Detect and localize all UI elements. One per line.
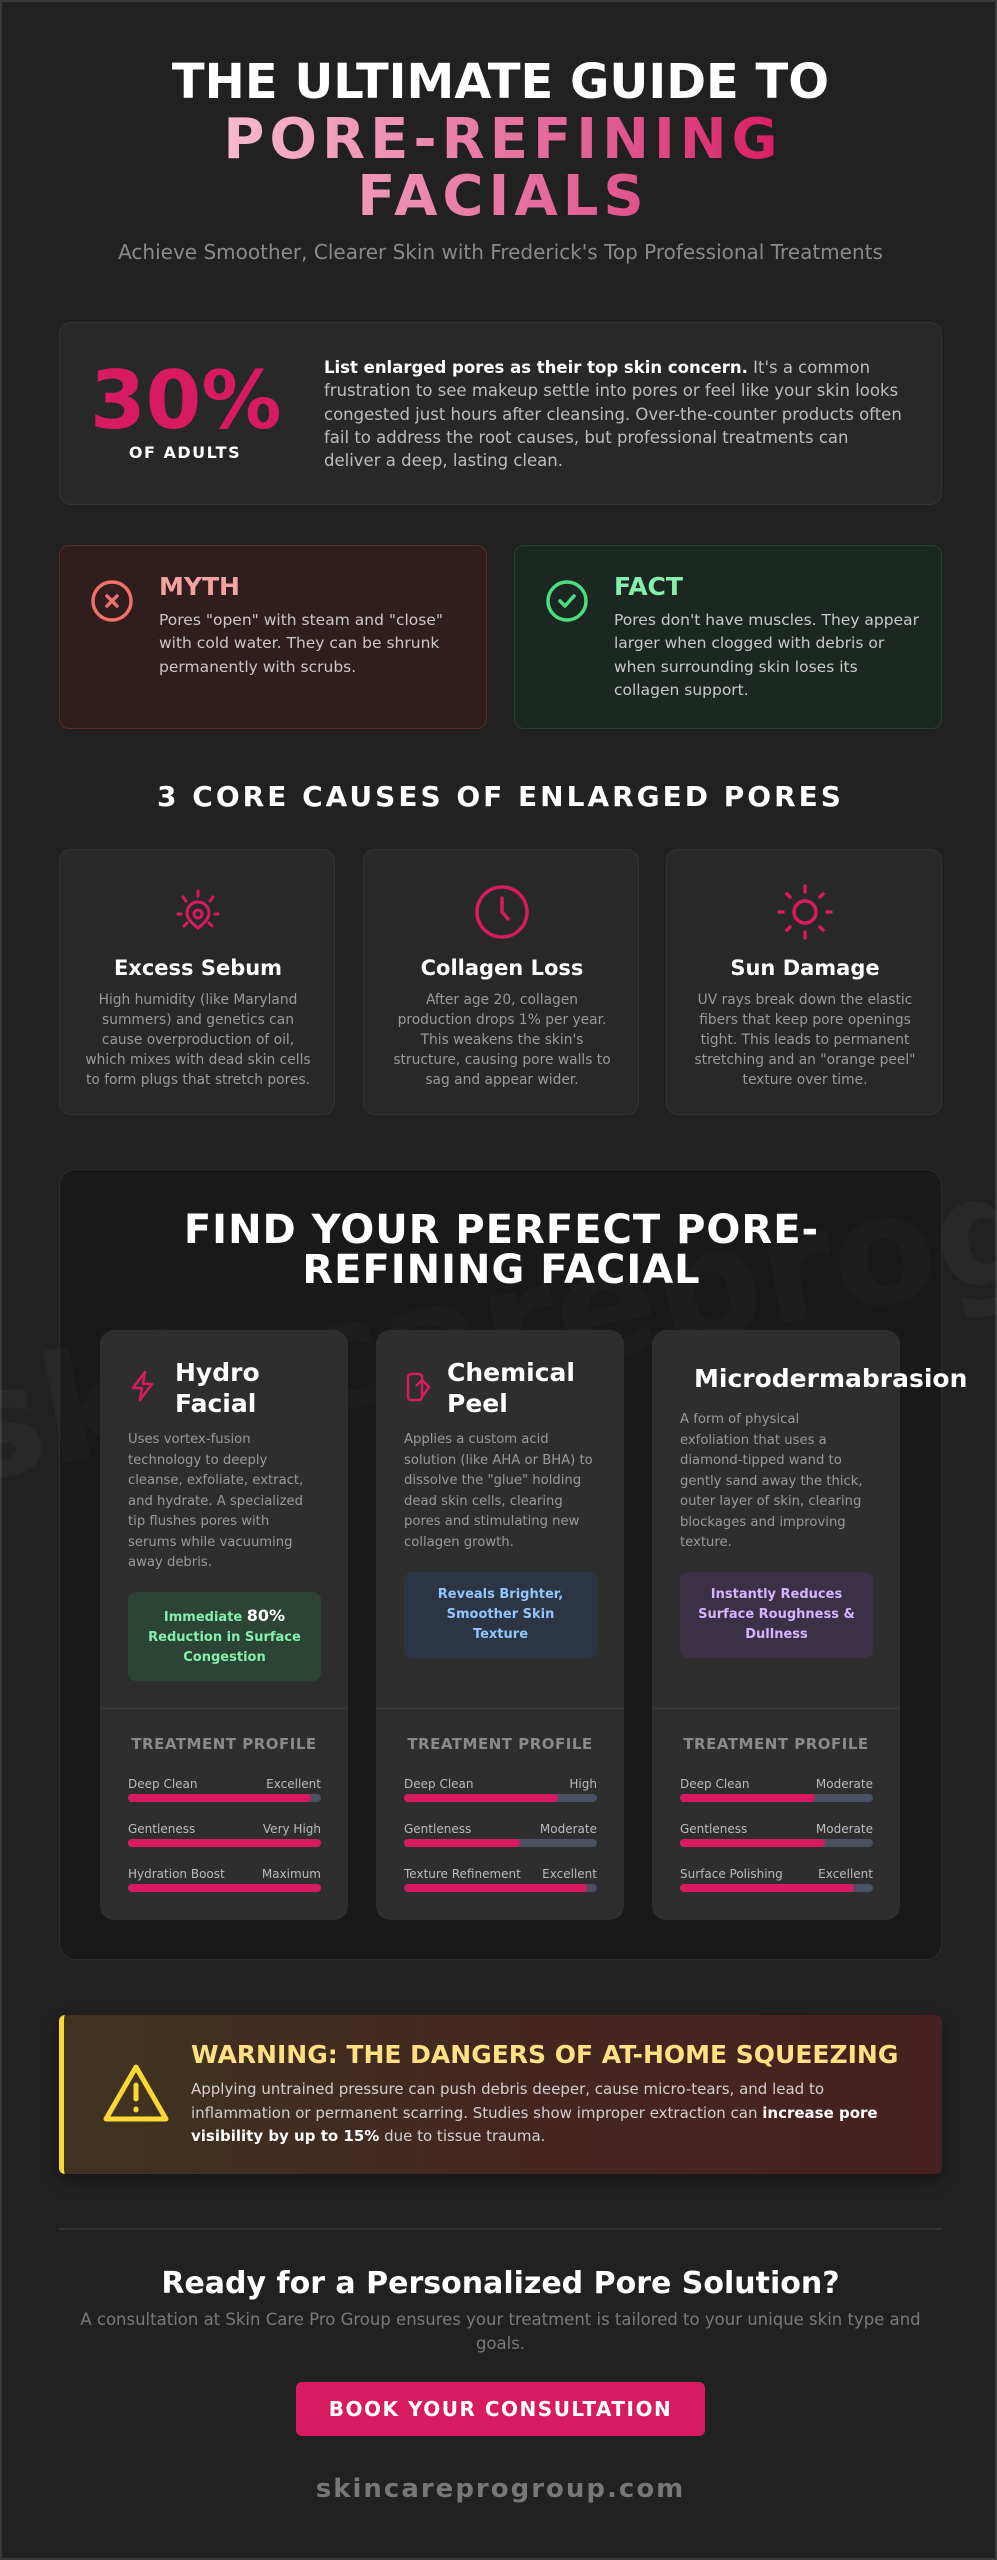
title: FACIALS [357, 164, 649, 229]
myth text: Pores "open" with steam and "close" with cold water. They can be shrunk permanently with scrubs. [159, 611, 443, 676]
micro text: A form of physical exfoliation that uses a diamond-tipped wand to gently sand away the thick, outer layer of skin, clearing blockages and improving texture. [680, 1412, 863, 1550]
panel: collagen loss [363, 849, 639, 1115]
card: chemical peel [376, 1330, 624, 1920]
hydro badge [128, 1592, 321, 1681]
micro profile: Moderate [816, 1777, 873, 1791]
hydro profile: Deep Clean [128, 1777, 198, 1791]
micro profile: Gentleness [680, 1822, 747, 1836]
micro profile: Surface Polishing [680, 1867, 783, 1881]
micro profile: Excellent [818, 1867, 873, 1881]
peel profile [376, 1708, 624, 1920]
peel profile: Excellent [542, 1867, 597, 1881]
stat number: 30% [90, 354, 281, 447]
warning heading: WARNING: THE DANGERS OF AT-HOME SQUEEZING [191, 2040, 898, 2069]
treatments heading: FIND YOUR PERFECT PORE- [184, 1207, 819, 1253]
micro badge: Dullness [745, 1627, 808, 1642]
fact text: Pores don't have muscles. They appear larger when clogged with debris or when surrounding skin loses its collagen support. [614, 611, 919, 699]
treatments heading: REFINING FACIAL [302, 1247, 701, 1293]
hydro badge: Immediate 80% Reduction in Surface Congestion [148, 1606, 301, 1665]
subtitle: Achieve Smoother, Clearer Skin with Frederick's Top Professional Treatments [118, 240, 883, 264]
title: PORE-REFINING [223, 107, 783, 172]
card: microdermabrasion [652, 1330, 900, 1920]
domain: skincareprogroup.com [316, 2474, 685, 2504]
sun title: Sun Damage [730, 956, 880, 980]
peel title [447, 1358, 575, 1418]
hydro profile: Very High [263, 1822, 321, 1836]
hydro title [175, 1358, 260, 1418]
peel badge: Smoother Skin [447, 1607, 554, 1622]
sebum title: Excess Sebum [114, 956, 282, 980]
warning text: Applying untrained pressure can push debris deeper, cause micro-tears, and lead to inflammation or permanent scarring. Studies show improper extraction can increase pore visibility by up to 15% due to tissue trauma. [191, 2080, 878, 2145]
micro badge: Instantly Reduces [711, 1587, 842, 1602]
micro profile: TREATMENT PROFILE [683, 1735, 869, 1753]
stat label: OF ADULTS [129, 443, 241, 462]
sebum text: High humidity (like Maryland summers) and genetics can cause overproduction of oil, which mixes with dead skin cells to form plugs that stretch pores. [85, 992, 311, 1088]
peel badge [404, 1572, 597, 1658]
micro badge: Surface Roughness & [698, 1607, 855, 1622]
micro profile [652, 1708, 900, 1920]
micro badge [680, 1572, 873, 1658]
icon: bolt [132, 1370, 154, 1402]
stat text: List enlarged pores as their top skin concern. It's a common frustration to see makeup settle into pores or feel like your skin looks congested just hours after cleansing. Over-the-counter products often fail to address the root causes, but professional treatments can deliver a deep, lasting clean. [324, 358, 902, 470]
collagen text: After age 20, collagen production drops 1% per year. This weakens the skin's structure, causing pore walls to sag and appear wider. [393, 992, 611, 1088]
panel: fact [514, 545, 942, 729]
warning callout [59, 2015, 942, 2174]
title [172, 54, 829, 229]
panel: treatments [59, 1169, 942, 1960]
myth heading: MYTH [159, 572, 240, 601]
icon: sun [777, 884, 833, 940]
cta heading: Ready for a Personalized Pore Solution? [161, 2266, 840, 2301]
hydro title: Facial [175, 1389, 256, 1418]
peel badge: Reveals Brighter, [438, 1587, 563, 1602]
hydro profile: Gentleness [128, 1822, 195, 1836]
icon: peel [406, 1372, 430, 1402]
hydro text: Uses vortex-fusion technology to deeply cleanse, exfoliate, extract, and hydrate. A specialized tip flushes pores with serums while vacuuming away debris. [128, 1432, 303, 1570]
peel badge: Texture [473, 1627, 528, 1642]
hydro title: Hydro [175, 1358, 260, 1387]
card: hydro facial [100, 1330, 348, 1920]
peel profile: Deep Clean [404, 1777, 474, 1791]
peel text: Applies a custom acid solution (like AHA or BHA) to dissolve the "glue" holding dead skin cells, clearing pores and stimulating new collagen growth. [404, 1432, 593, 1550]
hydro profile: TREATMENT PROFILE [131, 1735, 317, 1753]
hydro profile: Hydration Boost [128, 1867, 225, 1881]
causes heading: 3 CORE CAUSES OF ENLARGED PORES [157, 780, 844, 813]
icon: sebum [176, 890, 220, 930]
cta text: A consultation at Skin Care Pro Group ensures your treatment is tailored to your unique skin type and goals. [80, 2310, 921, 2353]
micro profile: Deep Clean [680, 1777, 750, 1791]
icon: warning [104, 2064, 168, 2122]
peel profile: High [569, 1777, 597, 1791]
peel title: Chemical [447, 1358, 575, 1387]
peel title: Peel [447, 1389, 508, 1418]
fact heading: FACT [614, 572, 683, 601]
collagen title: Collagen Loss [421, 956, 583, 980]
button [296, 2382, 705, 2436]
micro profile: Moderate [816, 1822, 873, 1836]
peel profile: TREATMENT PROFILE [407, 1735, 593, 1753]
sun text: UV rays break down the elastic fibers that keep pore openings tight. This leads to permanent stretching and an "orange peel" texture over time. [694, 992, 916, 1088]
hydro profile: Excellent [266, 1777, 321, 1791]
panel: excess sebum [59, 849, 335, 1115]
button: BOOK YOUR CONSULTATION [329, 2397, 672, 2421]
panel: myth [59, 545, 487, 729]
icon: clock [475, 885, 529, 939]
panel: sun damage [666, 849, 942, 1115]
peel profile: Gentleness [404, 1822, 471, 1836]
peel profile: Texture Refinement [404, 1867, 521, 1881]
stat card [59, 322, 942, 505]
treatments heading [184, 1207, 819, 1293]
hydro profile [100, 1708, 348, 1920]
icon: x circle [91, 580, 133, 622]
peel profile: Moderate [540, 1822, 597, 1836]
micro title: Microdermabrasion [694, 1364, 967, 1393]
icon: check circle [546, 580, 588, 622]
hydro profile: Maximum [262, 1867, 321, 1881]
title: THE ULTIMATE GUIDE TO [172, 54, 829, 110]
